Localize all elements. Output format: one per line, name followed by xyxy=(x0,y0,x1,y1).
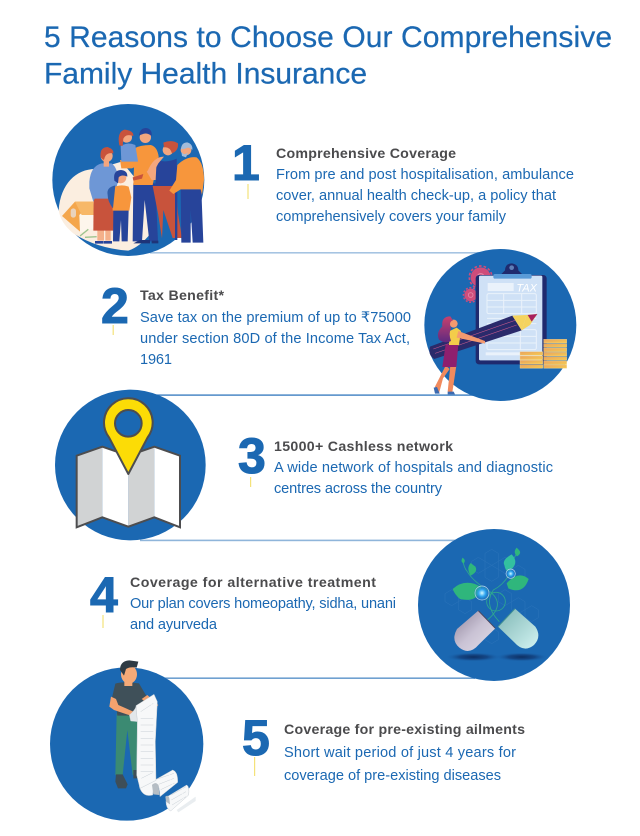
text block: network description: centres across the country xyxy=(274,481,443,497)
text block: tax description: 1961 xyxy=(140,352,172,368)
hexagon pattern xyxy=(445,549,538,644)
heading: alternative treatment: Coverage for alternative treatment xyxy=(130,575,376,591)
icon: tax clipboard with pencil xyxy=(424,249,576,401)
glowing nodes xyxy=(473,568,516,602)
tick mark xyxy=(250,477,251,487)
text block: coverage description: comprehensively covers your family xyxy=(276,209,507,225)
connector line 3 to 4 xyxy=(140,540,460,541)
panel: reason 5 pre-existing ailments xyxy=(50,660,525,821)
tick mark xyxy=(247,184,249,199)
heading: comprehensive coverage: Comprehensive Coverage xyxy=(276,146,456,162)
map xyxy=(77,447,180,527)
panel: reason 4 alternative treatment xyxy=(90,529,570,681)
icon: family in front of house xyxy=(52,104,204,256)
text block: treatment description: Our plan covers homeopathy, sidha, unani xyxy=(130,596,396,612)
number 2: 2 xyxy=(101,278,129,334)
number 3: 3 xyxy=(238,428,266,484)
text block: tax description: Save tax on the premium of up to ₹75000 xyxy=(140,310,411,326)
pencil xyxy=(429,314,537,359)
tick mark xyxy=(102,615,104,628)
connector line 1 to 2 xyxy=(150,252,485,254)
right woman xyxy=(147,141,182,240)
text block: tax description xyxy=(140,310,411,368)
capsule shadows xyxy=(445,652,548,662)
text block: treatment description xyxy=(130,596,396,633)
number 4: 4 xyxy=(90,567,118,623)
connector line 2 to 3 xyxy=(150,394,475,396)
paper scroll xyxy=(129,694,196,812)
plant stems xyxy=(463,553,517,622)
heading: cashless network: 15000+ Cashless network xyxy=(274,439,453,455)
leaves xyxy=(453,548,529,600)
title: Family Health Insurance xyxy=(44,58,367,90)
tick mark xyxy=(113,325,114,335)
text block: treatment description: and ayurveda xyxy=(130,617,218,633)
man figure xyxy=(109,660,158,788)
tick mark xyxy=(254,757,255,776)
coins xyxy=(520,339,567,368)
woman holding pencil xyxy=(434,316,485,394)
number 5: 5 xyxy=(242,710,270,766)
man xyxy=(133,128,159,243)
number 1: 1 xyxy=(232,135,260,191)
text block: ailments description: coverage of pre-existing diseases xyxy=(284,768,501,784)
left woman xyxy=(89,147,118,244)
text block: coverage description xyxy=(276,167,574,225)
icon: herbal capsule xyxy=(418,529,570,681)
clipboard xyxy=(476,263,547,364)
boy xyxy=(107,170,131,241)
capsule halves xyxy=(454,609,538,651)
panel: reason 1 comprehensive coverage xyxy=(52,104,574,256)
title: 5 Reasons to Choose Our Comprehensive xyxy=(44,21,612,54)
text block: network description xyxy=(274,460,553,497)
text block: ailments description xyxy=(284,745,516,784)
heading: pre-existing ailments: Coverage for pre-existing ailments xyxy=(284,722,525,738)
connector line 4 to 5 xyxy=(160,677,475,679)
gears xyxy=(463,266,492,302)
text block: coverage description: From pre and post hospitalisation, ambulance xyxy=(276,167,574,183)
text block: ailments description: Short wait period of just 4 years for xyxy=(284,745,516,761)
title xyxy=(44,21,612,90)
location pin xyxy=(104,398,153,474)
heading: tax benefit: Tax Benefit* xyxy=(140,288,224,304)
clipboard: TAX xyxy=(516,282,537,294)
child held xyxy=(119,130,143,181)
text block: coverage description: cover, annual health check-up, a policy that xyxy=(276,188,556,204)
icon: map with location pin xyxy=(55,390,206,540)
icon: man holding long document xyxy=(50,660,203,821)
text block: tax description: under section 80D of the Income Tax Act, xyxy=(140,331,410,347)
grandfather xyxy=(169,142,204,243)
text block: network description: A wide network of hospitals and diagnostic xyxy=(274,460,553,476)
panel: reason 3 cashless network xyxy=(55,390,553,540)
panel: reason 2 tax benefit xyxy=(101,249,576,401)
